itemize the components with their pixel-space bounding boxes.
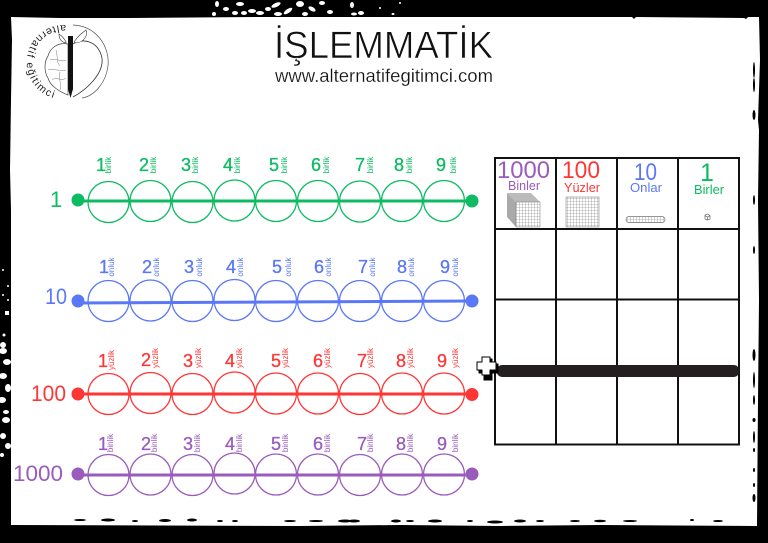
number line: ones (green): birlik [366,156,375,173]
column header: Birler: 1 [700,159,714,187]
website address: www.alternatifegitimci.com [274,66,493,86]
number line: tens (blue): onluk [284,256,293,277]
number line: ones (green): birlik [322,156,331,173]
number line: hundreds (red): 2 [141,350,151,370]
number line: hundreds (red): yüzlik [366,347,375,368]
number line: tens (blue): 5 [272,257,282,277]
number line: thousands (purple): binlik [150,433,159,452]
column header: Binler [497,157,550,227]
column header: Onlar: Onlar [630,180,663,195]
icon: thousands cube [507,193,540,227]
number line: hundreds (red): yüzlik [107,349,116,370]
number line: tens (blue): onluk [451,256,460,277]
column header: Birler: Birler [694,182,725,197]
column header: Yüzler [562,157,601,227]
icon: hundreds flat [566,197,599,227]
number line: hundreds (red): yüzlik [235,347,244,368]
number line: ones (green): 5 [269,155,279,175]
number line: hundreds (red): yüzlik [151,347,160,368]
column header: Yüzler: Yüzler [564,180,601,195]
number line: thousands (purple): 2 [141,434,151,454]
number line: tens (blue): 9 [440,257,450,277]
number line: hundreds (red): 9 [437,351,447,371]
number line: ones (green): birlik [449,156,458,173]
number line: hundreds (red): yüzlik [194,347,203,368]
number line: thousands (purple): binlik [366,433,375,452]
number line: thousands (purple): binlik [235,433,244,452]
number line: hundreds (red): yüzlik [406,347,415,368]
number line: hundreds (red): yüzlik [281,347,290,368]
number line: thousands (purple): binlik [451,433,460,452]
number line: hundreds (red): 5 [271,351,281,371]
number line: hundreds (red): 1 [98,351,108,371]
number line: thousands (purple): binlik [323,433,332,452]
place value table [495,157,739,444]
number line: ones (green): 3 [181,155,191,175]
column header: Birler [694,159,725,220]
logo text: alternatif eğitimci [26,24,66,98]
number line: hundreds (red): yüzlik [451,347,460,368]
number line: hundreds (red): 3 [183,351,193,371]
number line: tens (blue): 2 [142,257,152,277]
number line: thousands (purple): 5 [271,434,281,454]
title: İŞLEMMATİK [274,24,493,67]
number line: ones (green): birlik [233,156,242,173]
number line: hundreds (red): 6 [313,351,323,371]
number line: thousands (purple): binlik [406,433,415,452]
column header: Yüzler: 100 [562,157,600,184]
number line: thousands (purple): 9 [437,434,447,454]
number line: ones (green): 6 [311,155,321,175]
number line: ones (green): birlik [149,156,158,173]
row label 1000: 1000 [13,461,63,486]
column header: Onlar [626,159,665,222]
number line: thousands (purple): binlik [106,433,115,452]
number line: ones (green): birlik [104,156,113,173]
number line: ones (green): 2 [139,155,149,175]
number line: tens (blue): onluk [107,256,116,277]
number line: ones (green): 1 [96,155,106,175]
column header: Binler: 1000 [497,157,550,184]
number line: hundreds (red): 8 [396,351,406,371]
number line: tens (blue): 3 [184,257,194,277]
number line: ones (green): 4 [223,155,233,175]
row label 1: 1 [50,187,62,212]
addition bar [497,365,739,377]
number line: ones (green): 9 [436,155,446,175]
number line: tens (blue): 4 [226,257,236,277]
column header: Onlar: 10 [634,159,657,186]
number line: ones (green): 8 [394,155,404,175]
number line: thousands (purple): 1 [98,434,108,454]
number line: tens (blue): onluk [236,256,245,277]
number line: tens (blue): onluk [407,256,416,277]
number line: tens (blue): 1 [99,257,109,277]
number line: hundreds (red): yüzlik [323,347,332,368]
number line: hundreds (red): 7 [357,351,367,371]
number line: tens (blue): 8 [397,257,407,277]
row label 100: 100 [31,381,66,406]
number line: hundreds (red) [31,347,478,414]
number line: thousands (purple): binlik [281,433,290,452]
number line: thousands (purple): 8 [396,434,406,454]
number line: ones (green): birlik [191,156,200,173]
number line: ones (green): 7 [355,155,365,175]
icon: unit cube [705,214,710,220]
number line: thousands (purple): 3 [183,434,193,454]
column header: Binler: Binler [508,178,541,193]
number line: thousands (purple): 4 [225,434,235,454]
number line: thousands (purple): 6 [313,434,323,454]
number line: tens (blue): 7 [358,257,368,277]
icon: tens rod [626,216,665,222]
number line: thousands (purple): 7 [357,434,367,454]
number line: tens (blue): onluk [152,256,161,277]
number line: tens (blue): onluk [195,256,204,277]
icon: plus sign [477,357,498,380]
number line: tens (blue): onluk [368,256,377,277]
number line: thousands (purple): binlik [193,433,202,452]
number line: ones (green): birlik [280,156,289,173]
number line: tens (blue): 6 [314,257,324,277]
number line: hundreds (red): 4 [225,351,235,371]
row label 10: 10 [45,284,67,309]
number line: tens (blue): onluk [324,256,333,277]
number line: thousands (purple) [13,433,478,496]
number line: ones (green): birlik [405,156,414,173]
number line: tens (blue) [45,256,478,322]
logo: alternatif eğitimci [26,24,109,98]
number line: ones (green) [50,155,478,222]
